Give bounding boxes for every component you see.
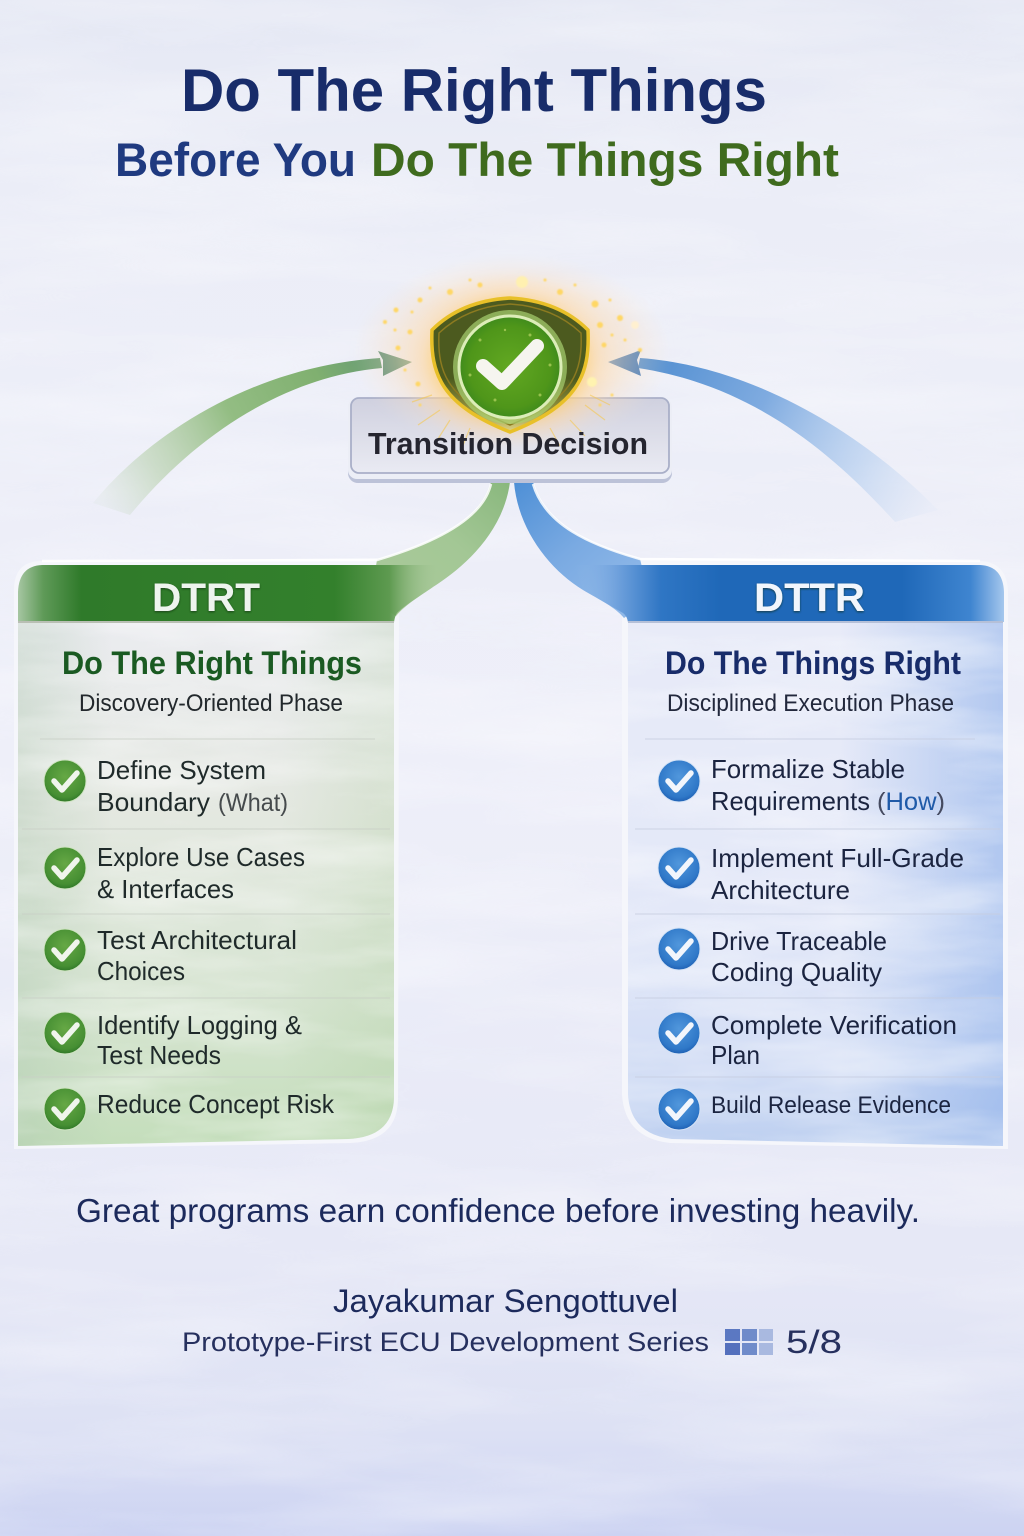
- icon: progress grid: [725, 1329, 773, 1355]
- item: explore use cases: Explore Use Cases: [97, 842, 305, 872]
- panel body: [18, 622, 394, 1146]
- title line 2: [115, 133, 839, 186]
- item: identify logging and test needs: Identify Logging &: [97, 1010, 302, 1040]
- author name: Jayakumar Sengottuvel: [333, 1283, 678, 1319]
- item: implement full-grade architecture: Architecture: [711, 875, 850, 905]
- item: implement full-grade architecture: [658, 843, 964, 905]
- decision label: Transition Decision: [368, 426, 648, 461]
- shield: [432, 298, 588, 432]
- item: reduce concept risk: [44, 1088, 335, 1130]
- panel frame: [622, 558, 1008, 1149]
- title line 2: Before You: [115, 133, 356, 186]
- connector: decision to DTTR: [514, 482, 980, 618]
- transition decision box: [348, 398, 672, 483]
- icon: glowing shield with check: [352, 254, 672, 450]
- item: complete verification plan: Complete Verification: [711, 1010, 957, 1040]
- item: define system boundary: Define System: [97, 755, 266, 785]
- item: reduce concept risk: Reduce Concept Risk: [97, 1089, 335, 1119]
- item: drive traceable coding quality: Coding Quality: [711, 957, 882, 987]
- title line 2: Do The Things Right: [371, 133, 839, 186]
- item: define system boundary: Boundary: [97, 787, 210, 817]
- item: build release evidence: Build Release Evidence: [711, 1092, 951, 1119]
- panel header: [575, 565, 1004, 622]
- check disc: [453, 310, 567, 424]
- check mark: [483, 346, 537, 383]
- item: formalize stable requirements: (How): [877, 788, 945, 816]
- title: [115, 57, 839, 186]
- tagline: Great programs earn confidence before investing heavily.: [76, 1192, 920, 1229]
- connector: decision to DTRT: [42, 482, 510, 616]
- item: test architectural choices: Test Architectural: [97, 925, 297, 955]
- item: test architectural choices: [44, 925, 297, 986]
- item: drive traceable coding quality: Drive Traceable: [711, 926, 887, 956]
- panel heading: Do The Right Things: [62, 645, 362, 681]
- panel frame: [14, 558, 399, 1149]
- header label: DTRT: [152, 576, 260, 620]
- panel: DTTR: [514, 482, 1008, 1149]
- panel header: [18, 565, 440, 622]
- arrow: blue arc into decision: [608, 350, 938, 522]
- item: explore use cases: & Interfaces: [97, 874, 234, 904]
- panel heading: Do The Things Right: [665, 645, 961, 681]
- item: define system boundary: (What): [218, 789, 288, 817]
- item: complete verification plan: [658, 1010, 957, 1070]
- item: identify logging and test needs: Test Needs: [97, 1040, 221, 1070]
- item: define system boundary: [44, 755, 288, 817]
- item: explore use cases: [44, 842, 305, 904]
- item: identify logging and test needs: [44, 1010, 302, 1070]
- item: test architectural choices: Choices: [97, 956, 185, 986]
- item: drive traceable coding quality: [658, 926, 887, 987]
- item: complete verification plan: Plan: [711, 1040, 760, 1070]
- panel body: [628, 622, 1003, 1146]
- title line 1: Do The Right Things: [181, 57, 767, 124]
- arrow: green arc into decision: [93, 351, 412, 515]
- panel: DTRT: [14, 482, 510, 1149]
- header label: DTTR: [754, 576, 865, 620]
- series label: Prototype-First ECU Development Series: [182, 1327, 709, 1357]
- series progress: 5/8: [786, 1324, 842, 1360]
- item: formalize stable requirements: [658, 754, 945, 816]
- outer haze: [352, 254, 672, 450]
- item: formalize stable requirements: Formalize Stable: [711, 754, 905, 784]
- item: build release evidence: [658, 1088, 951, 1130]
- item: formalize stable requirements: Requirements: [711, 786, 870, 816]
- item: implement full-grade architecture: Implement Full-Grade: [711, 843, 964, 873]
- panel subheading: Disciplined Execution Phase: [667, 690, 954, 717]
- panel subheading: Discovery-Oriented Phase: [79, 690, 343, 717]
- glow: [398, 272, 622, 448]
